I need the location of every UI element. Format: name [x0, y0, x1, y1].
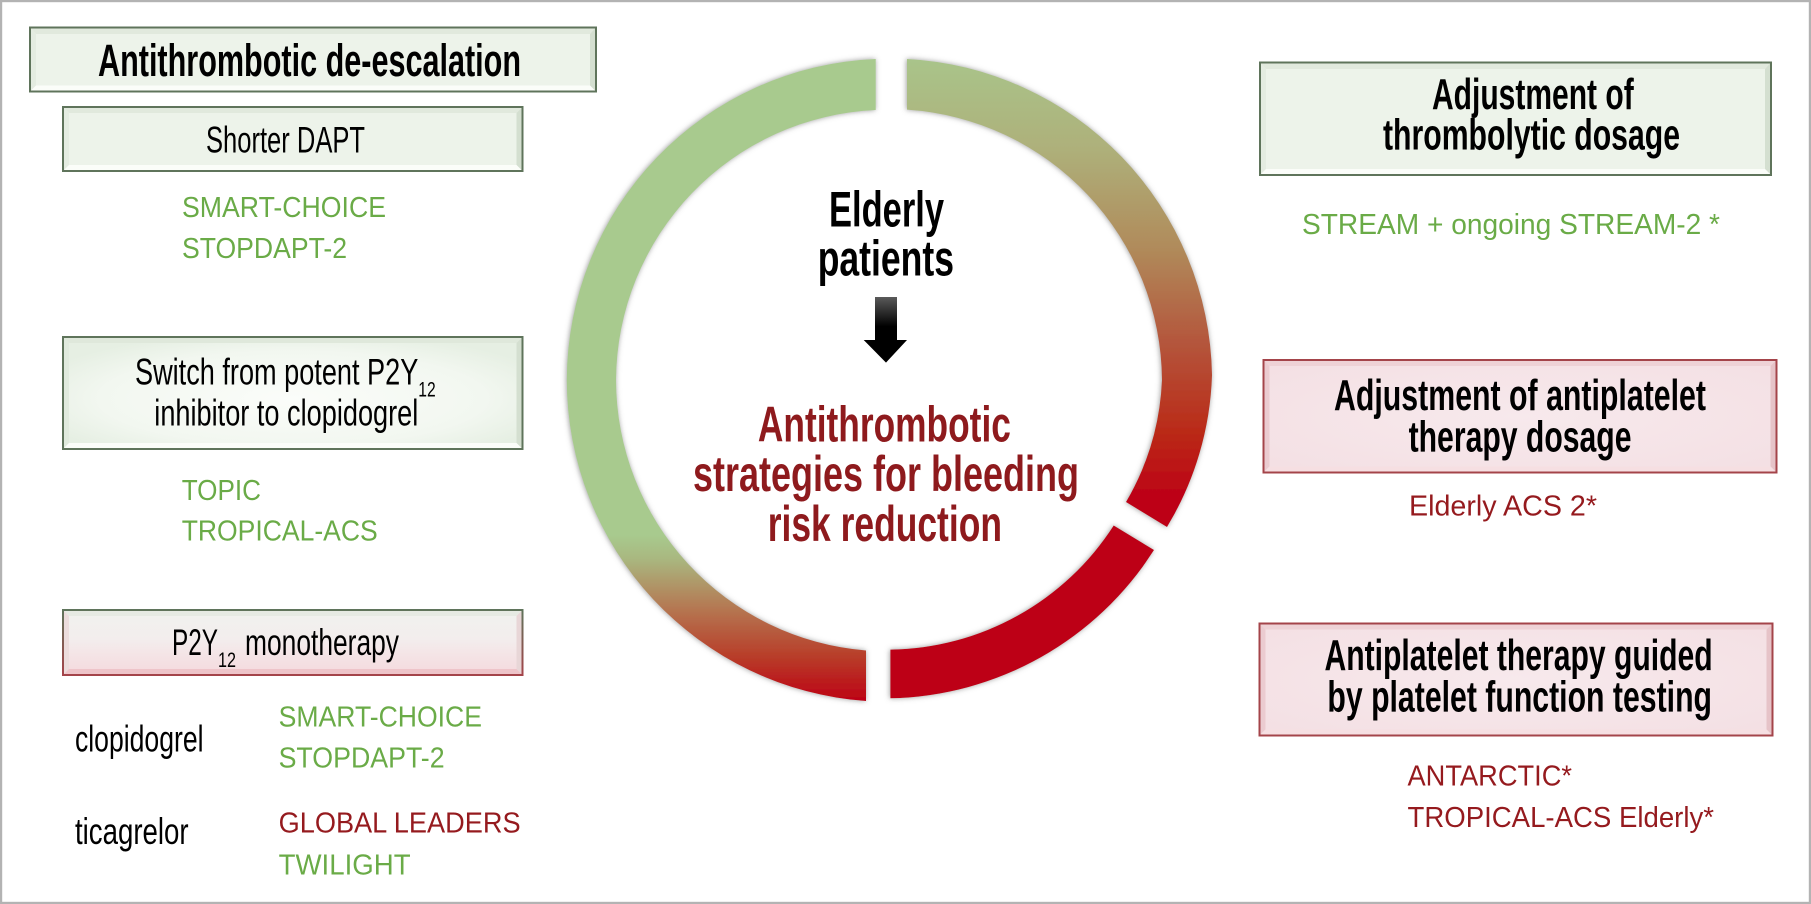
ring segment: red, bottom	[890, 526, 1154, 698]
trial list: ANTARCTIC and TROPICAL-ACS Elderly	[1408, 761, 1714, 834]
sub-box: P2Y12 monotherapy: 12	[218, 649, 236, 672]
sub-box: Shorter DAPT	[63, 107, 522, 171]
sub-box: P2Y12 monotherapy	[63, 610, 522, 675]
sub-box: switch to clopidogrel	[63, 337, 522, 449]
row: clopidogrel trials: STOPDAPT-2	[279, 743, 445, 775]
trial list: shorter DAPT	[182, 192, 386, 265]
heading box: Antithrombotic de-escalation	[30, 28, 596, 92]
row: ticagrelor trials: GLOBAL LEADERS	[279, 808, 521, 840]
row: clopidogrel trials	[75, 702, 482, 775]
trial list: shorter DAPT: STOPDAPT-2	[182, 233, 347, 265]
centre text: Antithrombotic strategies for bleeding risk reduction: strategies for bleeding	[693, 446, 1079, 502]
sub-box: switch to clopidogrel: 12	[418, 379, 436, 402]
centre text: Elderly patients	[818, 181, 954, 286]
centre text: Antithrombotic strategies for bleeding risk reduction: Antithrombotic	[758, 397, 1011, 453]
arrow: down	[864, 297, 907, 363]
ring diagram	[567, 59, 1212, 701]
box: Adjustment of thrombolytic dosage	[1260, 62, 1771, 175]
row: clopidogrel trials: clopidogrel	[75, 719, 204, 760]
row: ticagrelor trials	[75, 808, 521, 881]
trial list: switch to clopidogrel	[182, 475, 378, 548]
box: Adjustment of thrombolytic dosage: Adjustment of	[1432, 70, 1634, 119]
trial list: ANTARCTIC and TROPICAL-ACS Elderly: TROPICAL-ACS Elderly*	[1408, 802, 1714, 834]
centre text: Antithrombotic strategies for bleeding risk reduction: risk reduction	[768, 496, 1002, 552]
trial list: switch to clopidogrel: TROPICAL-ACS	[182, 516, 378, 548]
ring segment: green to red, left	[567, 59, 876, 701]
centre text: Elderly patients: patients	[818, 230, 954, 286]
box: Adjustment of thrombolytic dosage: thrombolytic dosage	[1383, 110, 1680, 159]
centre text: Antithrombotic strategies for bleeding risk reduction	[693, 397, 1079, 552]
box: Adjustment of antiplatelet therapy dosage	[1264, 360, 1776, 472]
row: clopidogrel trials: SMART-CHOICE	[279, 702, 482, 734]
sub-box: P2Y12 monotherapy: monotherapy	[245, 622, 399, 663]
heading box: Antithrombotic de-escalation: Antithrombotic de-escalation	[98, 35, 521, 86]
panel: right column strategies	[1260, 62, 1776, 834]
trial list: shorter DAPT: SMART-CHOICE	[182, 192, 386, 224]
sub-box: switch to clopidogrel: inhibitor to clopidogrel	[154, 393, 418, 434]
row: ticagrelor trials: ticagrelor	[75, 811, 189, 852]
trial list: switch to clopidogrel: TOPIC	[182, 475, 261, 507]
ring segment: green to red, right	[907, 59, 1212, 527]
box: Adjustment of antiplatelet therapy dosage: therapy dosage	[1409, 413, 1632, 462]
sub-box: Shorter DAPT: Shorter DAPT	[206, 120, 365, 161]
sub-box: switch to clopidogrel: Switch from potent P2Y	[135, 351, 418, 392]
trial list: STREAM: STREAM + ongoing STREAM-2 *	[1302, 209, 1720, 241]
panel: antithrombotic de-escalation column	[30, 28, 596, 881]
box: Antiplatelet therapy guided by platelet function testing	[1260, 624, 1772, 736]
centre text: Elderly patients: Elderly	[829, 181, 944, 237]
row: ticagrelor trials: TWILIGHT	[279, 849, 411, 881]
trial list: ANTARCTIC and TROPICAL-ACS Elderly: ANTARCTIC*	[1408, 761, 1572, 793]
trial list: Elderly ACS 2: Elderly ACS 2*	[1409, 491, 1597, 523]
sub-box: P2Y12 monotherapy: P2Y	[172, 622, 218, 663]
